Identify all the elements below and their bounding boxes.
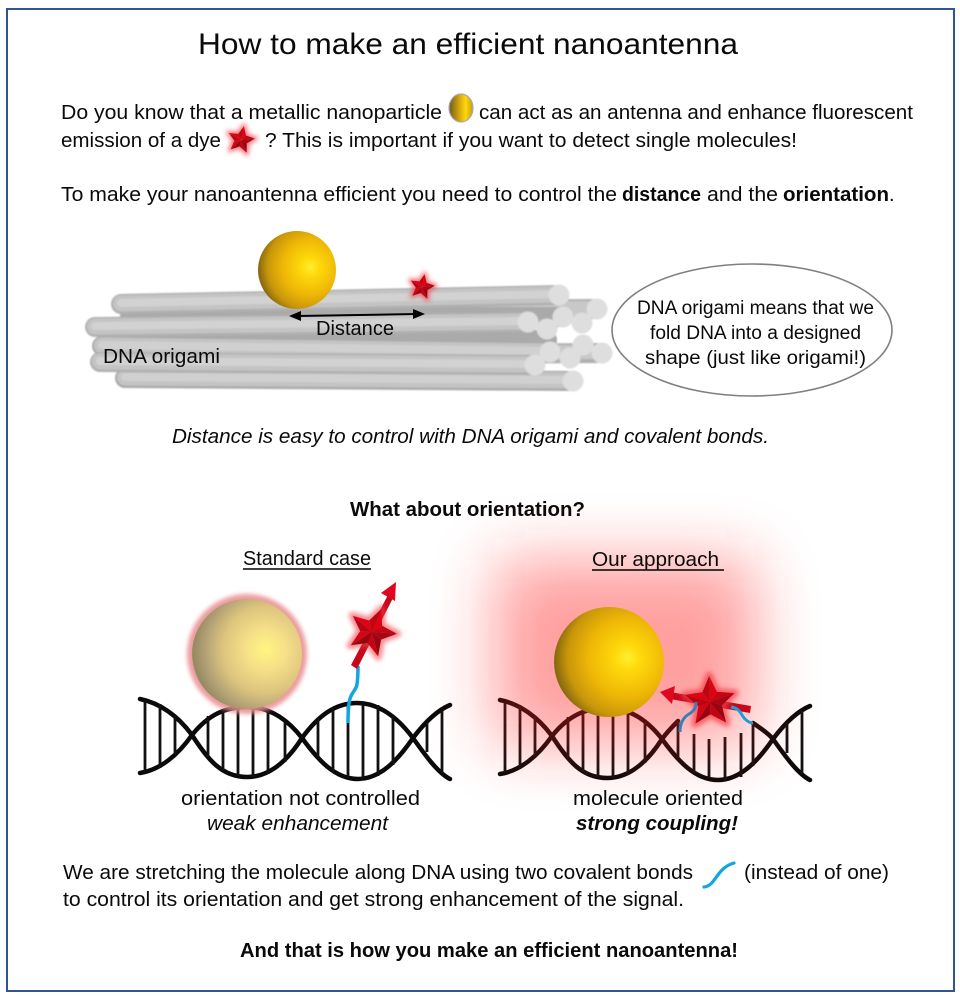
- distance label: Distance: [316, 318, 394, 340]
- gold nanoparticle: [554, 607, 664, 717]
- our approach caption: strong coupling!: [576, 813, 738, 835]
- dye star: standard: [341, 599, 405, 661]
- our approach caption: [573, 788, 743, 835]
- standard case caption: orientation not controlled: [181, 788, 420, 810]
- gold nanoparticle on origami: [258, 231, 336, 309]
- DNA origami bundle: [95, 284, 612, 392]
- control sentence: distance: [622, 184, 701, 206]
- control sentence: and the: [707, 184, 778, 206]
- callout: DNA origami definition: shape (just like origami!): [645, 348, 866, 369]
- icon: inline dye star: [225, 122, 258, 155]
- explanation text block: to control its orientation and get strong enhancement of the signal.: [63, 889, 684, 911]
- dipole arrow: random orientation: [351, 582, 396, 669]
- dye star on origami: [407, 271, 438, 301]
- title: How to make an efficient nanoantenna: [198, 28, 738, 61]
- intro text block: ? This is important if you want to detect single molecules!: [265, 130, 797, 152]
- callout: DNA origami definition: [612, 264, 892, 396]
- dipole arrow: aligned orientation: [660, 686, 751, 713]
- right covalent linker: [731, 707, 753, 723]
- control sentence: orientation: [783, 184, 889, 206]
- intro text block: can act as an antenna and enhance fluorescent: [479, 102, 913, 124]
- intro text block: Do you know that a metallic nanoparticle: [61, 102, 442, 124]
- callout: DNA origami definition: DNA origami means that we: [637, 298, 874, 319]
- explanation text block: We are stretching the molecule along DNA using two covalent bonds: [63, 862, 693, 884]
- closing statement: And that is how you make an efficient nanoantenna!: [240, 940, 738, 962]
- standard case heading: Standard case: [243, 548, 371, 570]
- control sentence: [61, 184, 895, 206]
- distance arrow: [289, 309, 425, 321]
- control sentence: .: [889, 184, 895, 206]
- panel: standard case: [140, 582, 450, 779]
- dye star: oriented: [683, 674, 736, 725]
- blue covalent linker: [348, 666, 358, 723]
- icon: covalent bond: [704, 863, 734, 887]
- callout: DNA origami definition: fold DNA into a designed: [650, 323, 861, 344]
- distance caption: Distance is easy to control with DNA origami and covalent bonds.: [172, 426, 769, 448]
- red plasmon glow: [495, 560, 755, 745]
- standard case caption: weak enhancement: [207, 813, 390, 835]
- panel: our approach: [495, 560, 810, 780]
- pale nanoparticle with weak glow: [187, 594, 307, 714]
- intro text block: [61, 102, 913, 152]
- DNA helix: our approach: [500, 700, 810, 780]
- icon: inline nanoparticle: [449, 94, 473, 122]
- DNA origami label: DNA origami: [103, 346, 220, 368]
- orientation heading: What about orientation?: [350, 499, 585, 521]
- standard case caption: [181, 788, 420, 835]
- explanation text block: [63, 862, 889, 911]
- DNA helix: standard: [140, 699, 450, 779]
- our approach caption: molecule oriented: [573, 788, 743, 810]
- intro text block: emission of a dye: [61, 130, 221, 152]
- control sentence: To make your nanoantenna efficient you need to control the: [61, 184, 617, 206]
- explanation text block: (instead of one): [744, 862, 889, 884]
- left covalent linker: [680, 702, 696, 732]
- our approach heading: Our approach: [592, 549, 719, 571]
